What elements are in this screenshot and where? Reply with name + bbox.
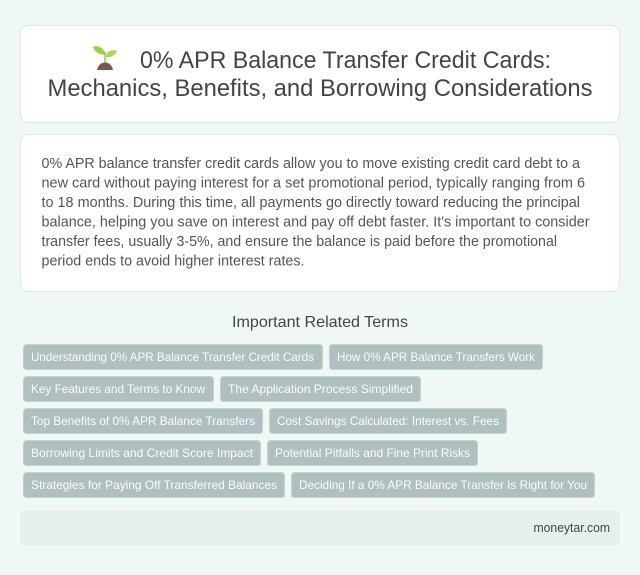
heading <box>48 47 592 102</box>
tag <box>24 472 284 498</box>
tag: Deciding If a 0% APR Balance Transfer Is Right for You <box>299 478 587 492</box>
tag: How 0% APR Balance Transfers Work <box>337 350 536 364</box>
tag <box>330 344 542 370</box>
tag <box>292 472 594 498</box>
text block: description: new card without paying interest for a set promotional period, typically ranging from 6 <box>42 174 585 192</box>
text block: description: 0% APR balance transfer credit cards allow you to move existing credit card debt to a <box>42 155 581 172</box>
tag <box>24 440 260 466</box>
text block: description: period ends to avoid higher interest rates. <box>42 252 304 270</box>
panel: description card <box>20 134 620 292</box>
icon: seedling <box>93 46 117 70</box>
tag: Top Benefits of 0% APR Balance Transfers <box>31 414 255 428</box>
tag: The Application Process Simplified <box>228 382 413 396</box>
tag <box>24 344 322 370</box>
tag <box>268 440 478 466</box>
text block: description: balance, helping you save on interest and pay off debt faster. It's important to consider <box>42 214 590 230</box>
panel: title card <box>20 26 620 122</box>
heading: important related terms: Important Related Terms <box>232 314 408 331</box>
tag: Cost Savings Calculated: Interest vs. Fees <box>277 414 499 428</box>
heading: 0% APR Balance Transfer Credit Cards: <box>140 47 551 74</box>
tag: Strategies for Paying Off Transferred Balances <box>31 478 277 492</box>
tag <box>24 408 262 434</box>
tag: Potential Pitfalls and Fine Print Risks <box>275 446 470 460</box>
tag <box>24 376 214 402</box>
footer <box>20 511 620 545</box>
tag: Key Features and Terms to Know <box>31 382 205 396</box>
tag <box>220 376 420 402</box>
heading: Mechanics, Benefits, and Borrowing Considerations <box>48 75 592 102</box>
footer source text: moneytar.com <box>534 520 610 535</box>
tag <box>270 408 506 434</box>
text block: description: transfer fees, usually 3-5%, and ensure the balance is paid before the promotional <box>42 233 557 250</box>
tag: Understanding 0% APR Balance Transfer Credit Cards <box>31 350 314 364</box>
text block: description <box>42 155 590 270</box>
text block: description: to 18 months. During this time, all payments go directly toward reducing the principal <box>42 194 580 211</box>
tag group: related terms <box>24 344 594 498</box>
tag: Borrowing Limits and Credit Score Impact <box>31 446 254 460</box>
